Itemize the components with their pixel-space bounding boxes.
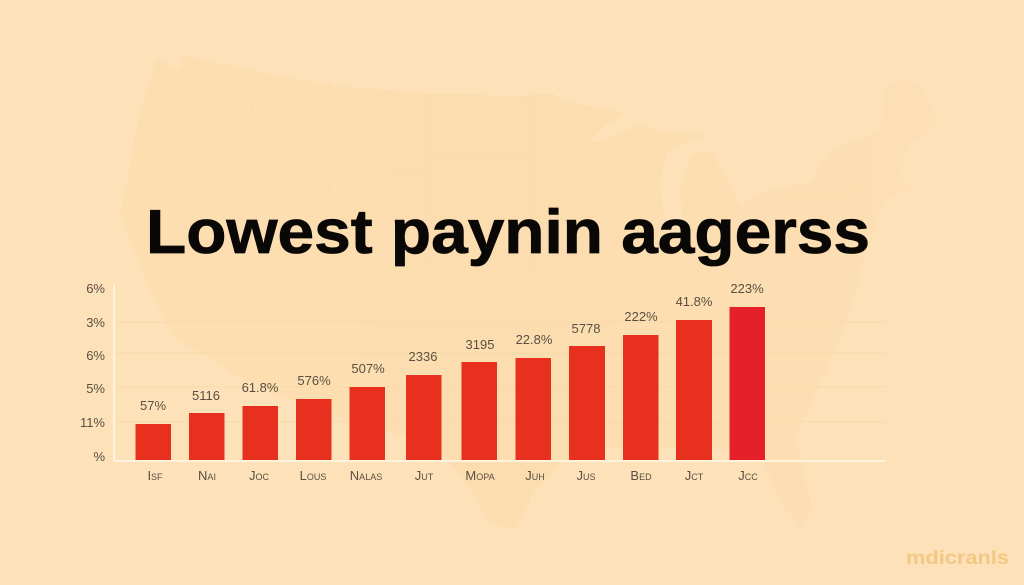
x-axis category labels: Juh <box>525 468 545 483</box>
x-axis category labels: Jut <box>415 468 434 483</box>
bar value labels: 2336 <box>409 349 437 364</box>
bar value labels: 223% <box>730 281 764 296</box>
background map of the United States <box>120 54 938 530</box>
y-axis labels: 6% <box>86 281 105 296</box>
x-axis category labels: Jus <box>576 468 596 483</box>
y-axis labels: 5% <box>86 381 105 396</box>
bar value labels: 61.8% <box>242 380 279 395</box>
y-axis labels: % <box>93 449 105 464</box>
x-axis category labels: Isf <box>147 468 163 483</box>
bar value labels: 3195 <box>466 337 494 352</box>
x-axis category labels: Bed <box>630 468 652 483</box>
y-axis labels <box>80 281 105 464</box>
x-axis category labels: Joc <box>249 468 270 483</box>
x-axis category labels: Jct <box>685 468 704 483</box>
bar value labels <box>140 281 764 413</box>
bars <box>136 307 765 460</box>
x-axis category labels: Lous <box>300 468 326 483</box>
y-axis labels: 6% <box>86 348 105 363</box>
bar value labels: 576% <box>297 373 331 388</box>
bar value labels: 5116 <box>192 388 220 403</box>
x-axis category labels <box>147 468 758 483</box>
y-axis labels: 11% <box>80 415 105 430</box>
bar value labels: 222% <box>624 309 658 324</box>
x-axis category labels: Nalas <box>350 468 382 483</box>
bar value labels: 41.8% <box>676 294 713 309</box>
title: Lowest paynin aagerss <box>146 198 870 267</box>
bar value labels: 22.8% <box>516 332 553 347</box>
bar value labels: 57% <box>140 398 166 413</box>
watermark logo: mdicranls <box>906 548 1009 569</box>
chart axes <box>114 285 886 461</box>
x-axis category labels: Mopa <box>465 468 495 483</box>
bar value labels: 5778 <box>572 321 600 336</box>
bar value labels: 507% <box>351 361 385 376</box>
chart gridlines <box>114 322 886 422</box>
x-axis category labels: Jcc <box>738 468 758 483</box>
y-axis labels: 3% <box>86 315 105 330</box>
x-axis category labels: Nai <box>198 468 216 483</box>
